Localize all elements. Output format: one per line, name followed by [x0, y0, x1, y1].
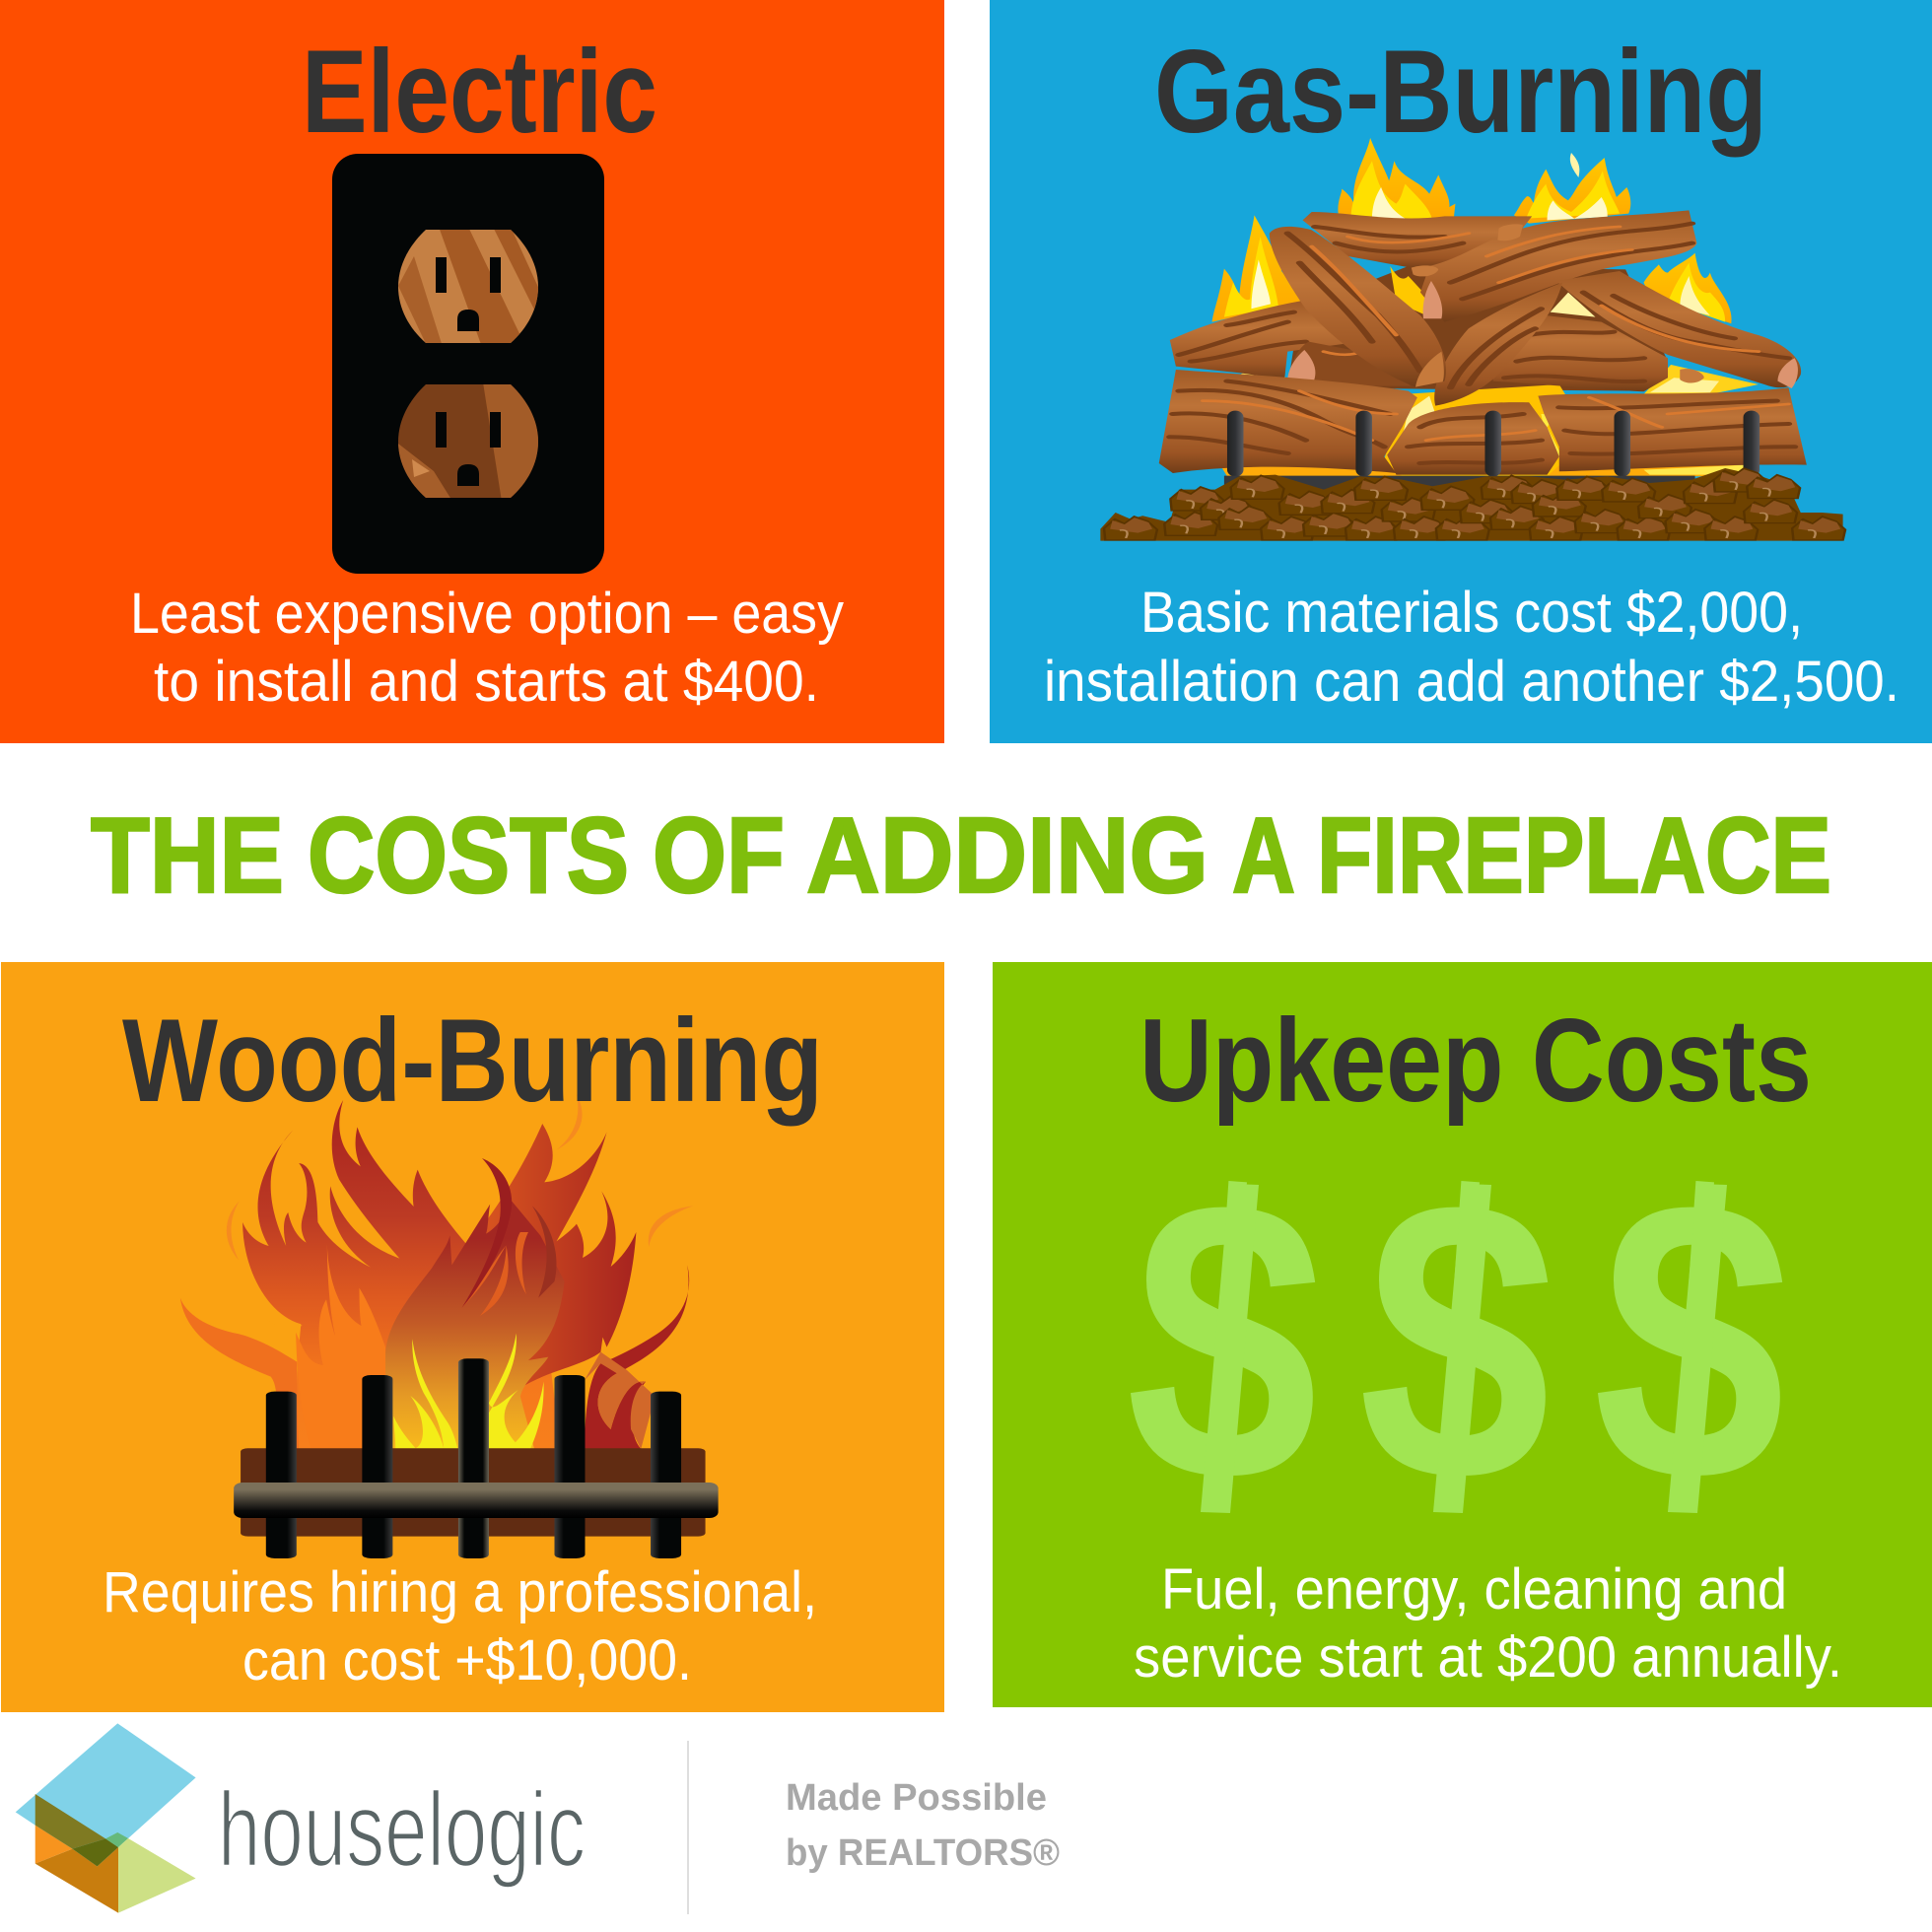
icon: dollar signs: $: [1347, 1109, 1569, 1571]
divider: [687, 1741, 689, 1914]
description: electric: to install and starts at $400.: [154, 650, 819, 714]
description: wood-burning: can cost +$10,000.: [242, 1628, 692, 1692]
tagline: made possible by realtors: Made Possible: [786, 1777, 1047, 1819]
flames: [180, 1298, 299, 1449]
dark claws: [462, 1158, 512, 1308]
description: electric: [130, 582, 844, 714]
icon: electrical outlet: [332, 154, 604, 574]
icon: dollar signs: [1115, 1109, 1804, 1571]
gravel pile: [1100, 468, 1845, 541]
grate: [241, 1448, 706, 1537]
panel: upkeep costs: [993, 962, 1932, 1707]
description: gas-burning: Basic materials cost $2,000,: [1140, 581, 1803, 645]
description: upkeep costs: Fuel, energy, cleaning and: [1161, 1557, 1787, 1622]
title: ADDING: [806, 795, 1208, 916]
icon: dollar signs: $: [1115, 1109, 1337, 1571]
flames behind logs: [1338, 138, 1455, 220]
yellow tongues: [393, 1339, 458, 1449]
description: gas-burning: [1044, 581, 1899, 714]
logo: houselogic wordmark: houselogic: [218, 1769, 586, 1889]
title: FIREPLACE: [1317, 795, 1831, 916]
illustration: wood fire with grate: [180, 1094, 719, 1558]
tagline: made possible by realtors: [786, 1777, 1060, 1874]
description: gas-burning: installation can add another $2,500.: [1044, 650, 1899, 714]
title: OF: [653, 795, 785, 916]
heading: wood-burning: Wood-Burning: [122, 995, 823, 1127]
title: [91, 795, 1831, 916]
shadow mass behind logs: [1287, 266, 1668, 391]
panel: gas-burning: [990, 0, 1932, 743]
tagline: made possible by realtors: by REALTORS®: [786, 1832, 1060, 1874]
panel: wood-burning: [1, 962, 944, 1712]
description: upkeep costs: [1134, 1557, 1842, 1690]
title: THE: [91, 795, 284, 916]
sparks: [227, 1201, 240, 1260]
description: wood-burning: Requires hiring a professional,: [103, 1560, 817, 1624]
grate posts: [1227, 411, 1243, 476]
title: COSTS: [308, 795, 629, 916]
fire inside logs: [1221, 465, 1747, 476]
panel: electric: [0, 0, 944, 743]
logs: [1492, 312, 1668, 391]
illustration: gas logs with flames: [1100, 138, 1845, 541]
heading: gas-burning: Gas-Burning: [1154, 26, 1767, 158]
icon: dollar signs: $: [1582, 1109, 1804, 1571]
description: wood-burning: [103, 1560, 817, 1692]
title: A: [1232, 795, 1295, 916]
logo: houselogic mark: [16, 1723, 196, 1913]
description: electric: Least expensive option – easy: [130, 582, 844, 646]
description: upkeep costs: service start at $200 annually.: [1134, 1625, 1842, 1690]
heading: upkeep costs: Upkeep Costs: [1139, 995, 1812, 1127]
heading: electric: Electric: [302, 26, 657, 158]
